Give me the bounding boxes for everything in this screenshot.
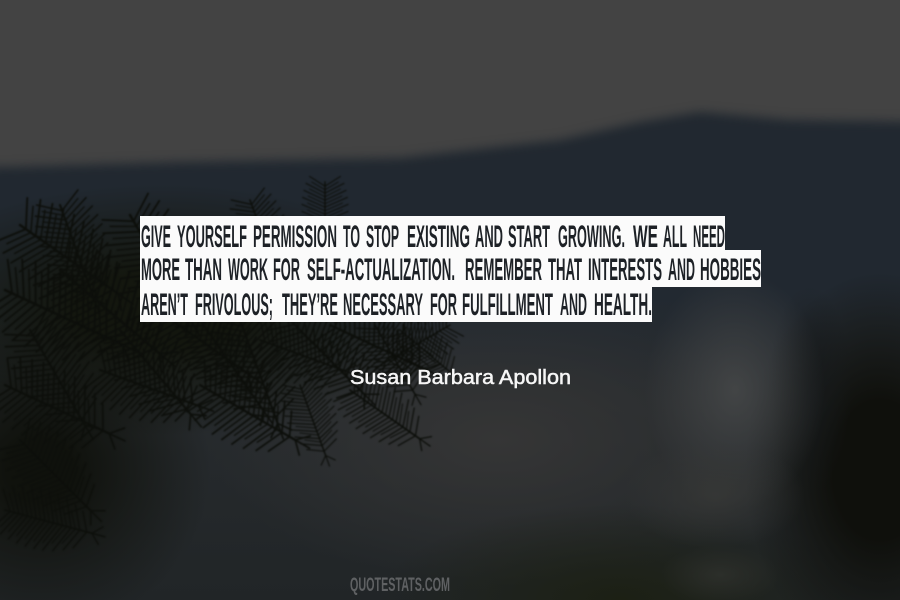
quote text: PERMISSION xyxy=(253,218,337,254)
quote text: HEALTH. xyxy=(594,286,652,322)
text: HOBBIES xyxy=(700,251,761,287)
quote text: ALL xyxy=(663,218,687,254)
quote text xyxy=(141,218,761,322)
author name: Susan Barbara Apollon xyxy=(350,367,571,389)
quote text: FRIVOLOUS; xyxy=(195,286,273,322)
quote text: MORE xyxy=(141,251,180,287)
quote text: REMEMBER xyxy=(465,251,542,287)
quote text: GROWING. xyxy=(558,218,625,254)
quote text: AND xyxy=(475,218,503,254)
white highlight strips xyxy=(140,216,761,322)
quote text: THEY’RE xyxy=(282,286,338,322)
quote text: AREN’T xyxy=(141,286,188,322)
quote text: AND xyxy=(668,251,695,287)
quote strips and text xyxy=(140,216,761,322)
quote text: FOR xyxy=(273,251,300,287)
watermark: QUOTESTATS.COM xyxy=(350,575,450,596)
quote text: THAT xyxy=(548,251,582,287)
quote text: WORK xyxy=(228,251,268,287)
quote text: STOP xyxy=(366,218,399,254)
quote text: INTERESTS xyxy=(588,251,662,287)
quote text: NEED xyxy=(693,218,725,254)
quote text: YOURSELF xyxy=(177,218,247,254)
quote text: START xyxy=(508,218,550,254)
mountain silhouette xyxy=(0,112,900,300)
quote text: AND xyxy=(560,286,587,322)
valley mist xyxy=(0,290,900,600)
illustration: pine branches xyxy=(0,176,477,565)
quote text: NECESSARY xyxy=(343,286,423,322)
quote text: EXISTING xyxy=(407,218,470,254)
quote text: SELF-ACTUALIZATION. xyxy=(307,251,455,287)
quote text: FOR xyxy=(430,286,457,322)
quote text: GIVE xyxy=(141,218,171,254)
quote text: FULFILLMENT xyxy=(462,286,553,322)
quote text: TO xyxy=(343,218,360,254)
quote text: THAN xyxy=(185,251,222,287)
quote text: WE xyxy=(633,218,658,254)
